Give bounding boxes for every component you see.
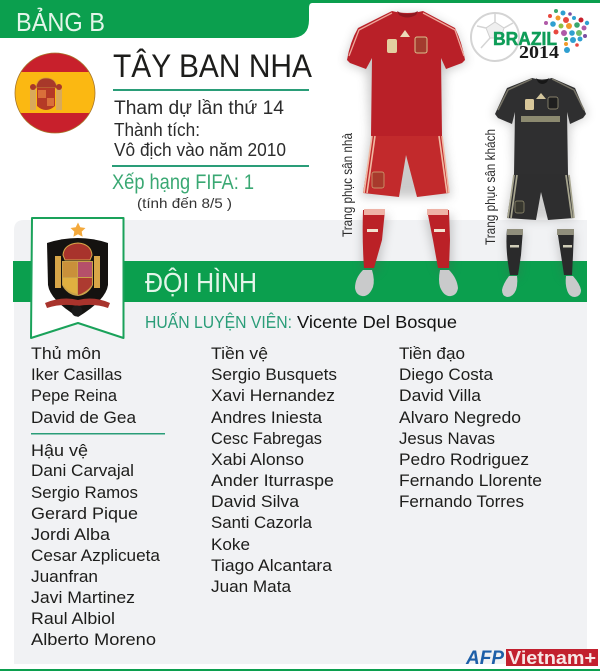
roster: goalkeepers [31, 344, 137, 427]
roster: goalkeepers: Pepe Reina [31, 386, 118, 405]
text: participation: Tham dự lần thứ 14 [114, 98, 284, 119]
roster: defenders: Javi Martinez [31, 588, 135, 607]
label: home kit: Trang phục sân nhà [340, 133, 355, 237]
roster: defenders: Raul Albiol [31, 609, 115, 628]
roster: forwards: Fernando Torres [399, 492, 524, 511]
text: achievements: Vô địch vào năm 2010 [114, 140, 286, 160]
away boots [502, 276, 517, 297]
roster: forwards: David Villa [399, 386, 482, 405]
icon: Spain flag [14, 52, 96, 134]
logo: Brazil 2014: 2014 [519, 42, 559, 62]
roster: midfielders: Xabi Alonso [211, 450, 304, 469]
roster: goalkeepers: David de Gea [31, 408, 137, 427]
icon: crest shield [45, 238, 110, 317]
home shirt [347, 11, 465, 136]
roster: defenders: Alberto Moreno [31, 630, 156, 649]
roster: midfielders: Juan Mata [211, 577, 292, 596]
icon: star [70, 222, 86, 237]
logo: AFP Vietnam+: Vietnam+ [508, 648, 596, 668]
roster: midfielders: Andres Iniesta [211, 408, 323, 427]
roster: goalkeepers: Iker Casillas [31, 365, 122, 384]
logo: AFP Vietnam+: AFP [465, 648, 504, 669]
roster: midfielders: Xavi Hernandez [211, 386, 335, 405]
roster: midfielders: Cesc Fabregas [211, 429, 322, 448]
roster: midfielders: Koke [211, 535, 250, 554]
heading: group name: BẢNG B [16, 7, 105, 37]
logo: AFP Vietnam+ [465, 648, 598, 669]
section band: squad [13, 261, 587, 302]
heading: squad: ĐỘI HÌNH [145, 267, 257, 298]
text: ranking date: (tính đến 8/5 ) [137, 195, 232, 211]
header: group tab [0, 0, 600, 38]
home shorts [363, 136, 449, 197]
roster: forwards: Tiền đạo [399, 344, 465, 363]
roster: forwards: Diego Costa [399, 365, 494, 384]
roster: midfielders [211, 344, 337, 596]
roster: forwards: Jesus Navas [399, 429, 495, 448]
roster: defenders [31, 441, 161, 649]
roster: defenders: Sergio Ramos [31, 483, 138, 502]
roster: defenders: Jordi Alba [31, 525, 111, 544]
roster: goalkeepers: Thủ môn [31, 344, 101, 363]
roster: forwards: Pedro Rodriguez [399, 450, 529, 469]
text: achievements [114, 120, 286, 160]
text: coach [145, 311, 457, 332]
roster: midfielders: David Silva [211, 492, 300, 511]
text: achievements: Thành tích: [114, 120, 200, 140]
heading: country name: TÂY BAN NHA [113, 48, 313, 84]
home boots [355, 270, 374, 296]
roster: midfielders: Santi Cazorla [211, 513, 313, 532]
away shirt [495, 78, 586, 174]
roster: defenders: Juanfran [31, 567, 98, 586]
illustration: away kit [493, 78, 588, 297]
roster: midfielders: Sergio Busquets [211, 365, 337, 384]
home socks [363, 210, 385, 268]
text: FIFA ranking: Xếp hạng FIFA: 1 [112, 171, 254, 194]
emblem: federation crest ribbon [31, 218, 124, 338]
roster: forwards [399, 344, 542, 511]
roster: defenders: Gerard Pique [31, 504, 138, 523]
roster: midfielders: Ander Iturraspe [211, 471, 334, 490]
roster: defenders: Cesar Azplicueta [31, 546, 161, 565]
roster: defenders: Hậu vệ [31, 441, 88, 460]
text: coach: Vicente Del Bosque [297, 312, 457, 332]
roster: midfielders: Tiền vệ [211, 344, 268, 363]
roster: forwards: Alvaro Negredo [399, 408, 521, 427]
illustration: home kit [345, 11, 467, 296]
logo: Brazil 2014: BRAZIL [493, 29, 557, 49]
roster: forwards: Fernando Llorente [399, 471, 542, 490]
label: away kit: Trang phục sân khách [483, 129, 498, 245]
away socks [506, 229, 523, 275]
logo: Brazil 2014 [471, 9, 589, 62]
roster: defenders: Dani Carvajal [31, 461, 134, 480]
text: coach: HUẤN LUYỆN VIÊN: [145, 311, 292, 332]
away shorts [507, 174, 574, 220]
panel: squad background [14, 220, 587, 664]
roster: midfielders: Tiago Alcantara [211, 556, 333, 575]
